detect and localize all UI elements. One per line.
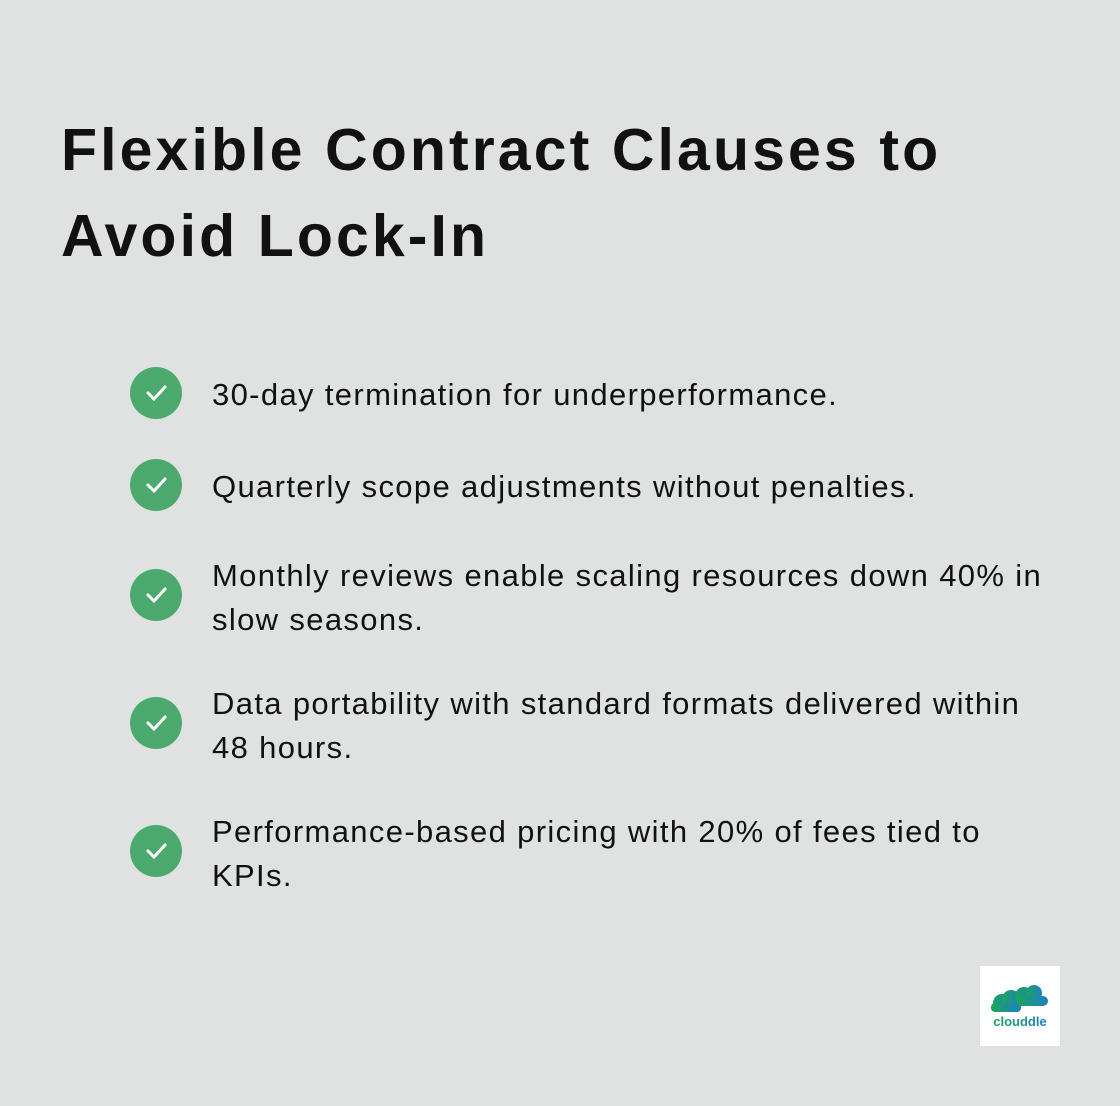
- item 1: [130, 367, 838, 419]
- text: Performance-based pricing with 20% of fees tied to: [212, 814, 981, 849]
- icon: check: [130, 569, 182, 621]
- text: [212, 686, 1020, 765]
- logo: [980, 966, 1060, 1046]
- item 5: [130, 814, 981, 893]
- item 4: [130, 686, 1020, 765]
- text: 48 hours.: [212, 730, 353, 765]
- text: 30-day termination for underperformance.: [212, 377, 838, 412]
- icon: check: [130, 367, 182, 419]
- title: Avoid Lock-In: [61, 203, 489, 269]
- title: [61, 117, 941, 269]
- text: Monthly reviews enable scaling resources down 40% in: [212, 558, 1042, 593]
- text: Data portability with standard formats delivered within: [212, 686, 1020, 721]
- icon: check: [130, 825, 182, 877]
- title: Flexible Contract Clauses to: [61, 117, 941, 183]
- icon: check: [130, 459, 182, 511]
- text: slow seasons.: [212, 602, 424, 637]
- item 2: [130, 459, 917, 511]
- text: [212, 558, 1042, 637]
- logo: clouddle: [993, 1014, 1047, 1029]
- text: [212, 814, 981, 893]
- text: KPIs.: [212, 858, 293, 893]
- icon: check: [130, 697, 182, 749]
- item 3: [130, 558, 1042, 637]
- text: Quarterly scope adjustments without penalties.: [212, 469, 917, 504]
